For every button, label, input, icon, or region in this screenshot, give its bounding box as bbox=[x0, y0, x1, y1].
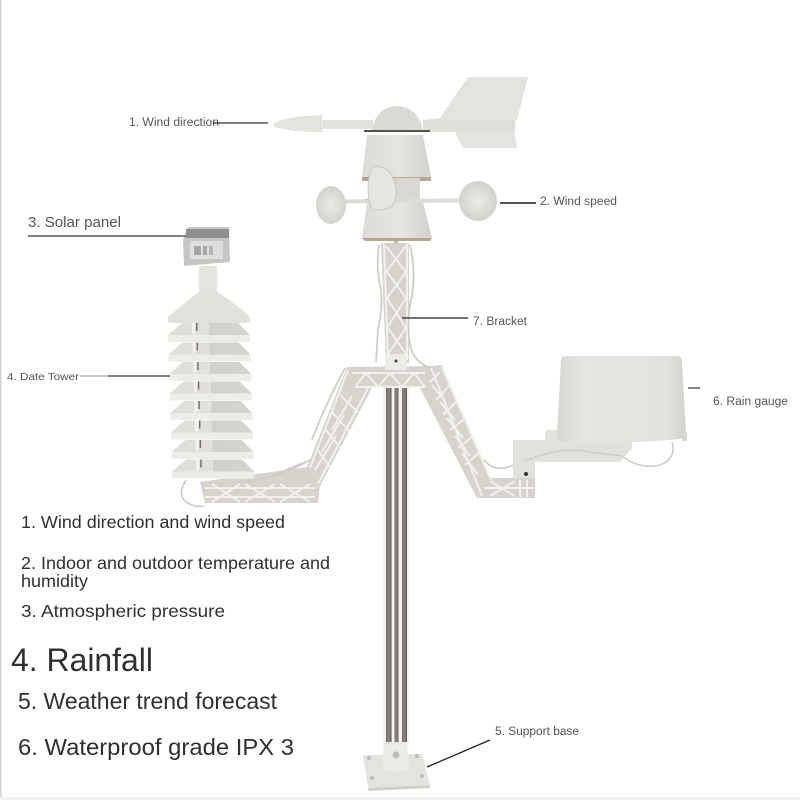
label: wind speed: 2. Wind speed bbox=[540, 196, 617, 208]
label: support base: 5. Support base bbox=[495, 726, 579, 738]
support base bbox=[363, 742, 430, 791]
feature 2 bbox=[21, 553, 330, 591]
feature 5: 5. Weather trend forecast bbox=[18, 688, 277, 714]
label: wind direction bbox=[129, 117, 268, 129]
wind direction vane bbox=[273, 77, 528, 148]
label: rain gauge bbox=[688, 388, 788, 408]
rain gauge arm bbox=[420, 365, 550, 498]
pole bbox=[383, 385, 409, 745]
solar panel bbox=[183, 227, 230, 290]
feature 4: 4. Rainfall bbox=[11, 642, 153, 678]
label: wind direction: 1. Wind direction bbox=[129, 117, 219, 129]
feature 6: 6. Waterproof grade IPX 3 bbox=[18, 734, 294, 760]
label: date tower: 4. Date Tower bbox=[7, 371, 80, 383]
feature 2: humidity bbox=[21, 571, 88, 591]
label: solar panel: 3. Solar panel bbox=[28, 214, 121, 231]
label: bracket: 7. Bracket bbox=[473, 316, 528, 328]
label: support base bbox=[427, 726, 579, 767]
feature 2: 2. Indoor and outdoor temperature and bbox=[21, 553, 330, 573]
label: rain gauge: 6. Rain gauge bbox=[713, 396, 788, 408]
tower roof bbox=[168, 288, 250, 323]
left bracket arm bbox=[181, 366, 430, 506]
label: bracket bbox=[402, 316, 528, 328]
tower louvers bbox=[168, 323, 254, 478]
sensor head bbox=[362, 135, 432, 241]
feature 1: 1. Wind direction and wind speed bbox=[21, 512, 285, 532]
feature 3: 3. Atmospheric pressure bbox=[21, 601, 225, 621]
rain gauge bbox=[557, 356, 687, 443]
rain gauge bracket bbox=[513, 430, 673, 478]
label: wind speed bbox=[500, 196, 617, 208]
bracket mast bbox=[376, 238, 430, 370]
data tower bbox=[168, 288, 254, 478]
feature list bbox=[11, 512, 330, 760]
anemometer cups bbox=[316, 166, 497, 224]
